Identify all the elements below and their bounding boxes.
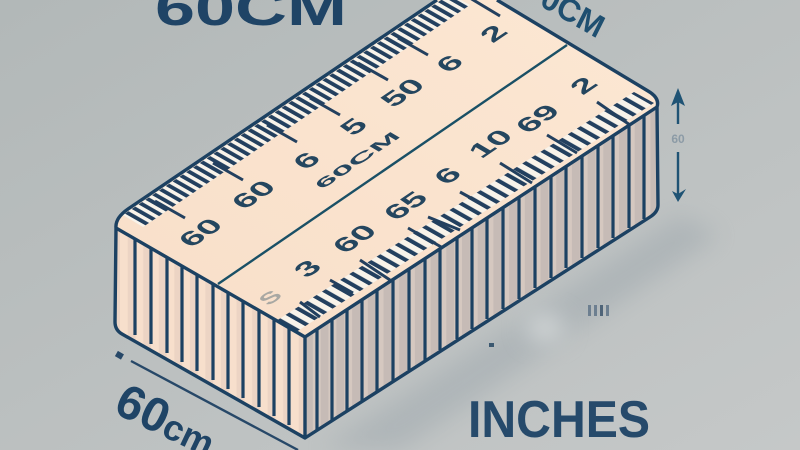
ruler numbers: upper row: 60 — [225, 176, 283, 213]
width dimension line — [115, 351, 298, 450]
ruler numbers: upper row: 5 — [333, 114, 374, 140]
ruler numbers: upper row: 2 — [473, 21, 514, 47]
ruler numbers: upper row: 6 — [429, 51, 470, 77]
major tick marks — [155, 0, 630, 317]
ruler numbers: upper row — [172, 21, 514, 251]
ruler numbers: lower row: 3 — [287, 256, 328, 282]
ruler label: 60CM on face: 60CM — [310, 129, 405, 191]
left face with stripes — [115, 228, 305, 438]
ruler numbers: lower row: S — [254, 287, 288, 309]
center divider line — [218, 45, 567, 284]
ruler numbers: lower row: 60 — [326, 220, 384, 257]
ruler numbers: lower row: 69 — [509, 100, 567, 137]
ruler numbers: lower row: 6 — [427, 163, 468, 189]
ruler numbers: lower row: 2 — [563, 73, 604, 99]
ruler block — [115, 0, 658, 438]
ruler numbers: upper row: 6 — [286, 148, 327, 174]
ruler numbers: lower row: 10 — [462, 125, 520, 162]
upper ruler ticks — [123, 0, 470, 227]
height dimension arrow: 60 — [671, 132, 685, 146]
ruler numbers: upper row: 60 — [172, 214, 230, 251]
ruler numbers: upper row: 50 — [374, 74, 432, 111]
lower ruler ticks — [276, 92, 654, 332]
block outline — [115, 0, 658, 438]
ruler numbers: lower row: 65 — [377, 187, 435, 224]
ruler numbers: lower row — [254, 73, 604, 309]
label: INCHES: INCHES — [468, 391, 650, 449]
small marks near block — [489, 305, 609, 347]
height dimension arrow — [671, 88, 686, 202]
top face — [116, 0, 658, 337]
right face with stripes — [305, 107, 657, 438]
block shadow — [320, 215, 720, 450]
